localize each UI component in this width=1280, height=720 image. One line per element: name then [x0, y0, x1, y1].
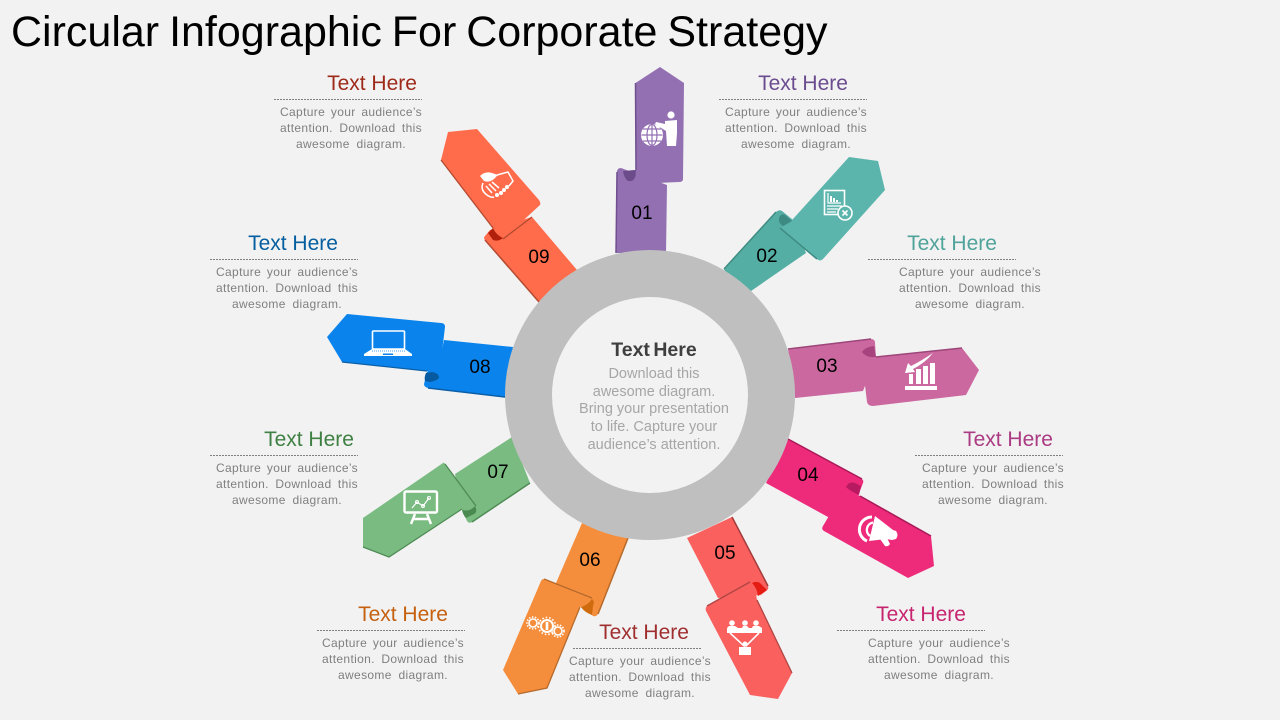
ribbon 07: 07: [487, 462, 509, 483]
ribbon 02: 02: [756, 246, 778, 267]
text block 05: Text Here: [599, 621, 689, 644]
icon: presentation board: [404, 492, 437, 524]
text block 07: Capture your audience’s: [216, 461, 358, 475]
ribbon 02: [724, 157, 885, 300]
ribbon 04: [766, 439, 934, 578]
text block 03: [915, 428, 1064, 507]
ribbon 09: 09: [528, 247, 550, 268]
ribbon 03: [788, 339, 979, 406]
text block 06: attention. Download this: [322, 652, 464, 666]
text block 09: Text Here: [327, 72, 417, 95]
icon: handshake: [480, 172, 513, 197]
text block 02: Text Here: [907, 232, 997, 255]
text block 09: Capture your audience’s: [280, 105, 422, 119]
ribbon 04: 04: [797, 465, 819, 486]
ribbon 07: [363, 437, 530, 557]
text block 07: awesome diagram.: [232, 493, 342, 507]
text block 06: Text Here: [358, 603, 448, 626]
center text: to life. Capture your: [591, 419, 717, 435]
text block 09: [274, 72, 422, 151]
icon: megaphone with target: [859, 516, 898, 546]
ribbon 01: 01: [631, 203, 653, 224]
ribbon 06: [503, 523, 628, 694]
ribbon 06: 06: [579, 550, 601, 571]
text block 08: [210, 232, 358, 311]
icon: growth bar chart: [905, 353, 937, 390]
text block 07: Text Here: [264, 428, 354, 451]
text block 08: awesome diagram.: [232, 297, 342, 311]
text block 02: attention. Download this: [899, 281, 1041, 295]
text block 06: [317, 603, 465, 682]
ribbon 03: 03: [816, 356, 838, 377]
icon: connected gears: [527, 617, 564, 637]
center text: Download this: [608, 366, 700, 382]
text block 07: attention. Download this: [216, 477, 358, 491]
center text: [579, 339, 729, 453]
text block 08: Text Here: [248, 232, 338, 255]
text block 08: Capture your audience’s: [216, 265, 358, 279]
text block 04: awesome diagram.: [884, 668, 994, 682]
text block 01: Text Here: [758, 72, 848, 95]
text block 09: attention. Download this: [280, 121, 422, 135]
center text: Bring your presentation: [579, 401, 729, 417]
ribbon 09: [441, 129, 577, 302]
ribbon 01: [616, 67, 684, 253]
ribbon 08: [327, 314, 513, 397]
text block 05: [569, 621, 711, 700]
text block 03: attention. Download this: [922, 477, 1064, 491]
text block 01: [719, 72, 867, 151]
text block 05: Capture your audience’s: [569, 654, 711, 668]
center text: awesome diagram.: [593, 384, 715, 400]
text block 03: Text Here: [963, 428, 1053, 451]
text block 08: attention. Download this: [216, 281, 358, 295]
text block 05: awesome diagram.: [585, 686, 695, 700]
ribbon 08: 08: [469, 357, 491, 378]
text block 06: awesome diagram.: [338, 668, 448, 682]
text block 01: attention. Download this: [725, 121, 867, 135]
center text: audience’s attention.: [588, 437, 720, 453]
icon: report with x badge: [824, 190, 852, 220]
ribbon 05: [687, 517, 792, 699]
text block 01: awesome diagram.: [741, 137, 851, 151]
text block 04: Text Here: [876, 603, 966, 626]
text block 03: awesome diagram.: [938, 493, 1048, 507]
text block 09: awesome diagram.: [296, 137, 406, 151]
central ring: [528, 274, 772, 516]
title: Circular Infographic For Corporate Strategy: [11, 8, 828, 56]
ribbon 05: 05: [714, 543, 736, 564]
text block 02: Capture your audience’s: [899, 265, 1041, 279]
text block 01: Capture your audience’s: [725, 105, 867, 119]
text block 02: awesome diagram.: [915, 297, 1025, 311]
text block 05: attention. Download this: [569, 670, 711, 684]
text block 06: Capture your audience’s: [322, 636, 464, 650]
text block 02: [868, 232, 1041, 311]
icon: globe and presenter: [641, 111, 677, 146]
text block 07: [210, 428, 358, 507]
text block 03: Capture your audience’s: [922, 461, 1064, 475]
icon: laptop: [364, 331, 412, 356]
text block 04: Capture your audience’s: [868, 636, 1010, 650]
text block 04: attention. Download this: [868, 652, 1010, 666]
icon: people funnel: [727, 620, 762, 655]
text block 04: [837, 603, 1010, 682]
center text: Text Here: [611, 339, 697, 361]
